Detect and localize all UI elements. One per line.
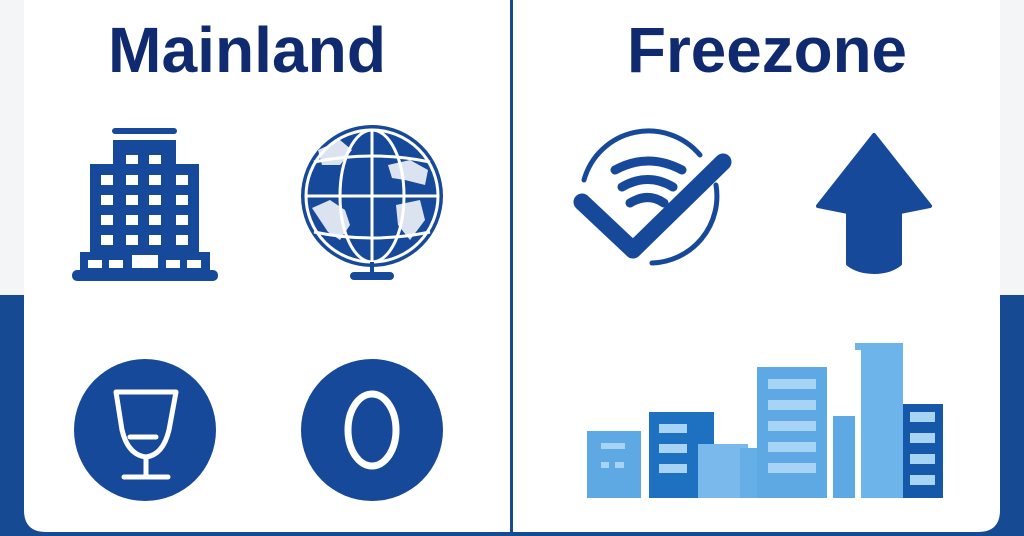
background blue band [0, 295, 1024, 536]
icon: up arrow [818, 135, 930, 272]
title: Mainland: Mainland [108, 14, 386, 86]
icon: glass circle [74, 359, 216, 501]
divider [510, 0, 513, 536]
icon: zero circle [301, 359, 443, 501]
icon: office building [72, 128, 218, 281]
icon: city skyline [587, 343, 943, 498]
icon: check with wifi [582, 131, 723, 263]
icon: globe [301, 125, 443, 280]
title: Freezone: Freezone [627, 14, 907, 86]
